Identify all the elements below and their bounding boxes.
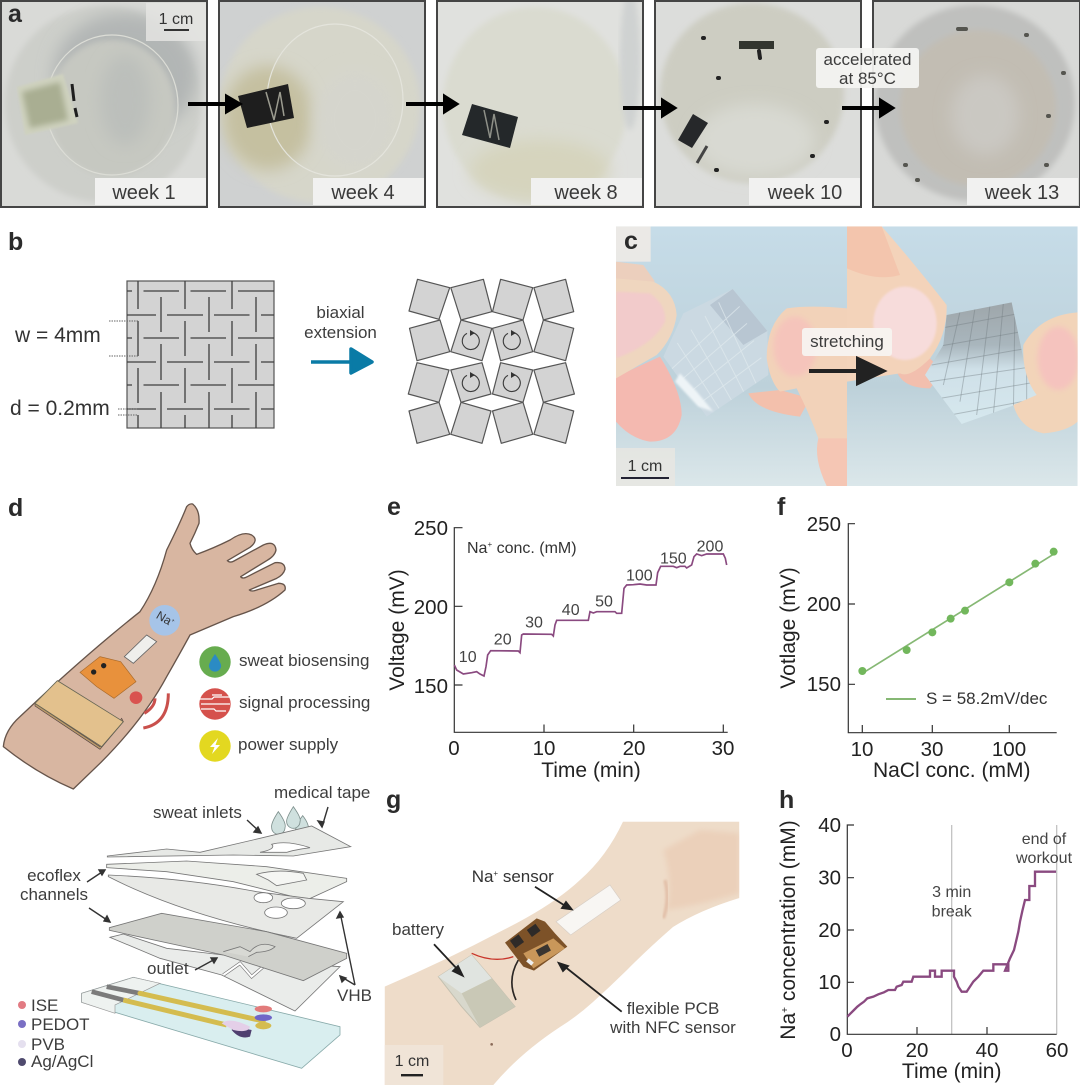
photo: week 8: week 8	[553, 182, 618, 204]
y axis title: concentration (mM)	[777, 820, 800, 1007]
label: sweat biosensing: sweat biosensing	[239, 651, 369, 670]
label: biaxial extension: extension	[304, 323, 377, 342]
x axis title: Time (min)	[902, 1060, 1001, 1083]
concentration labels: 20	[494, 632, 512, 648]
photo: before stretching	[616, 226, 847, 486]
scale bar: 1 cm: 1 cm	[159, 11, 193, 28]
label: power supply: power supply	[238, 735, 339, 754]
panel e: voltage vs time chart	[386, 493, 734, 782]
panel label e: e	[387, 493, 401, 521]
arrow: Na sensor	[535, 887, 572, 909]
x tick labels: 10	[851, 738, 873, 761]
x tick labels: 60	[1046, 1039, 1068, 1062]
arrow: stretching	[809, 359, 883, 383]
scale bar: 1 cm	[616, 448, 675, 486]
photo: week 4	[219, 1, 425, 207]
arrow: week 8 to 10	[623, 101, 674, 115]
panel label h: h	[779, 786, 794, 814]
concentration labels	[459, 539, 723, 666]
x tick labels	[841, 1039, 1068, 1062]
y tick labels: 250	[807, 513, 841, 536]
concentration labels: 200	[697, 539, 723, 556]
annotation: 3 min break: 3 min	[932, 884, 971, 901]
panel c: stretching photos	[616, 226, 1079, 486]
y tick labels: 200	[807, 593, 841, 616]
photo: after stretching	[847, 226, 1079, 486]
photo: week 10: week 10	[767, 182, 842, 204]
y axis title: +	[780, 1007, 791, 1013]
axes and ticks	[454, 528, 728, 732]
x axis title: Time (min)	[541, 759, 641, 782]
x tick labels: 20	[906, 1039, 928, 1062]
annotation: end of workout: end of	[1022, 831, 1067, 848]
photo: week 10	[655, 1, 861, 207]
panel label g: g	[386, 786, 401, 814]
legend: electrode materials	[18, 996, 93, 1071]
concentration labels: 30	[525, 614, 543, 632]
y tick labels: 40	[818, 814, 841, 837]
panel d: arm illustration and device stack	[3, 494, 372, 1071]
legend: electrode materials: ISE	[31, 996, 58, 1015]
label: biaxial extension: biaxial	[316, 303, 365, 322]
label: ecoflex channels	[20, 866, 88, 904]
scale bar: 1 cm: 1 cm	[628, 458, 662, 475]
diagram: unstretched cut pattern	[109, 281, 274, 428]
label: signal processing: signal processing	[239, 693, 370, 712]
arrow: week 4 to 8	[406, 97, 456, 111]
y tick labels: 0	[830, 1023, 841, 1046]
label: VHB: VHB	[337, 986, 372, 1005]
y tick labels	[807, 513, 841, 696]
axes and ticks	[848, 524, 1057, 733]
diagram: exploded device layers	[82, 807, 351, 1068]
label: biaxial extension	[304, 303, 377, 342]
y axis title: Votlage (mV)	[777, 567, 800, 689]
icon: power supply	[199, 730, 231, 762]
voltage trace	[454, 554, 727, 676]
label: sweat inlets: sweat inlets	[153, 803, 242, 822]
panel f: calibration chart	[777, 493, 1058, 782]
x tick labels: 30	[712, 737, 734, 760]
concentration labels: 50	[595, 594, 613, 611]
label: Na sensor: sensor	[498, 867, 554, 886]
concentration labels: 10	[459, 649, 477, 666]
label: flexible PCB with NFC sensor: with NFC sensor	[609, 1018, 736, 1037]
panel b: kirigami pattern schematic	[8, 228, 574, 443]
y tick labels: 150	[807, 673, 841, 696]
x tick labels: 30	[921, 738, 943, 761]
photo: week 13: week 13	[984, 182, 1059, 204]
icon: signal processing	[199, 688, 231, 720]
illustration: forearm with device: Na	[154, 608, 174, 628]
label: medical tape: medical tape	[274, 783, 370, 802]
x tick labels: 0	[448, 737, 460, 760]
panel a: degradation photo series	[1, 0, 1080, 207]
concentration trace	[847, 872, 1056, 1017]
diagram: stretched rotating squares	[408, 279, 574, 443]
arrow: biaxial extension	[311, 349, 372, 373]
label: outlet: outlet	[147, 959, 189, 978]
panel label f: f	[777, 493, 786, 521]
annotation: Na conc: conc. (mM)	[492, 540, 577, 557]
photo: forearm with patch	[385, 822, 739, 1085]
legend: slope: S = 58.2mV/dec	[926, 689, 1048, 708]
photo: week 8	[437, 0, 643, 207]
concentration labels: 150	[660, 550, 687, 567]
label: ecoflex channels: ecoflex	[27, 866, 81, 885]
x tick labels: 0	[841, 1039, 853, 1062]
axes and ticks	[847, 825, 1057, 1034]
annotation: 3 min break	[932, 884, 973, 920]
x tick labels	[448, 737, 734, 760]
arrow: week 1 to 4	[188, 97, 239, 111]
annotation: Na conc: Na	[467, 540, 487, 557]
label: ecoflex channels: channels	[20, 885, 88, 904]
x axis title: NaCl conc. (mM)	[873, 759, 1030, 782]
annotation: Na conc: +	[487, 540, 492, 549]
legend: electrode materials: PVB	[31, 1035, 65, 1054]
label: w = 4mm: w = 4mm	[14, 324, 101, 347]
panel label d: d	[8, 494, 23, 522]
photo: week 13	[873, 1, 1080, 207]
foil sample stretched	[925, 302, 1040, 424]
callout: accelerated at 85C	[816, 48, 919, 88]
y tick labels: 200	[414, 596, 448, 619]
label: Na sensor: +	[493, 869, 498, 878]
x tick labels: 10	[533, 737, 555, 760]
icon: sweat biosensing	[199, 646, 231, 678]
y tick labels: 10	[818, 971, 841, 994]
photo: week 1	[1, 1, 207, 207]
arrow: week 10 to 13	[842, 101, 892, 115]
x tick labels: 40	[976, 1039, 998, 1062]
arrows: stack callouts	[87, 807, 355, 985]
panel label b: b	[8, 228, 23, 256]
callout: accelerated at 85C: accelerated	[824, 50, 911, 69]
y tick labels: 20	[818, 919, 841, 942]
reference lines	[952, 825, 1057, 1034]
annotation: end of workout: workout	[1015, 850, 1073, 867]
scale bar: 1 cm: 1 cm	[395, 1053, 429, 1070]
y tick labels: 250	[414, 517, 448, 540]
callout: accelerated at 85C: at 85°C	[839, 69, 896, 88]
y tick labels: 30	[818, 866, 841, 890]
label: Na sensor: Na	[472, 867, 493, 886]
illustration: forearm with device	[3, 504, 285, 789]
photo: week 1: week 1	[111, 182, 176, 204]
illustration: forearm with device: +	[170, 618, 176, 625]
x tick labels	[851, 738, 1026, 761]
arrow: flexible PCB	[559, 963, 622, 1012]
label: flexible PCB with NFC sensor: flexible PCB	[627, 999, 719, 1018]
callout: stretching	[802, 328, 892, 356]
y tick labels: 150	[414, 675, 448, 698]
label: flexible PCB with NFC sensor	[609, 999, 736, 1037]
y tick labels	[818, 814, 841, 1046]
frames	[1, 1, 1080, 207]
label: d = 0.2mm: d = 0.2mm	[10, 397, 110, 420]
annotation: 3 min break: break	[932, 904, 973, 920]
annotation: end of workout	[1015, 831, 1073, 867]
panel h: workout concentration chart	[777, 786, 1073, 1083]
arrow: battery	[434, 944, 463, 976]
photo: week 4: week 4	[330, 182, 395, 204]
concentration labels: 100	[626, 568, 653, 585]
y axis title: Na	[777, 1013, 800, 1040]
legend: electrode materials: PEDOT	[31, 1015, 90, 1034]
x tick labels: 100	[992, 738, 1026, 761]
foil sample unstretched	[663, 289, 768, 417]
callout: stretching: stretching	[810, 332, 884, 351]
label: battery: battery	[392, 920, 444, 939]
concentration labels: 40	[562, 602, 580, 619]
fit line and data points	[858, 548, 1058, 675]
panel label c: c	[624, 227, 638, 255]
legend: electrode materials: Ag/AgCl	[31, 1052, 93, 1071]
panel label a: a	[8, 0, 23, 28]
x tick labels: 20	[623, 737, 645, 760]
panel g: on-skin device photo	[385, 786, 739, 1085]
y axis title: Voltage (mV)	[386, 569, 409, 691]
y tick labels	[414, 517, 448, 698]
